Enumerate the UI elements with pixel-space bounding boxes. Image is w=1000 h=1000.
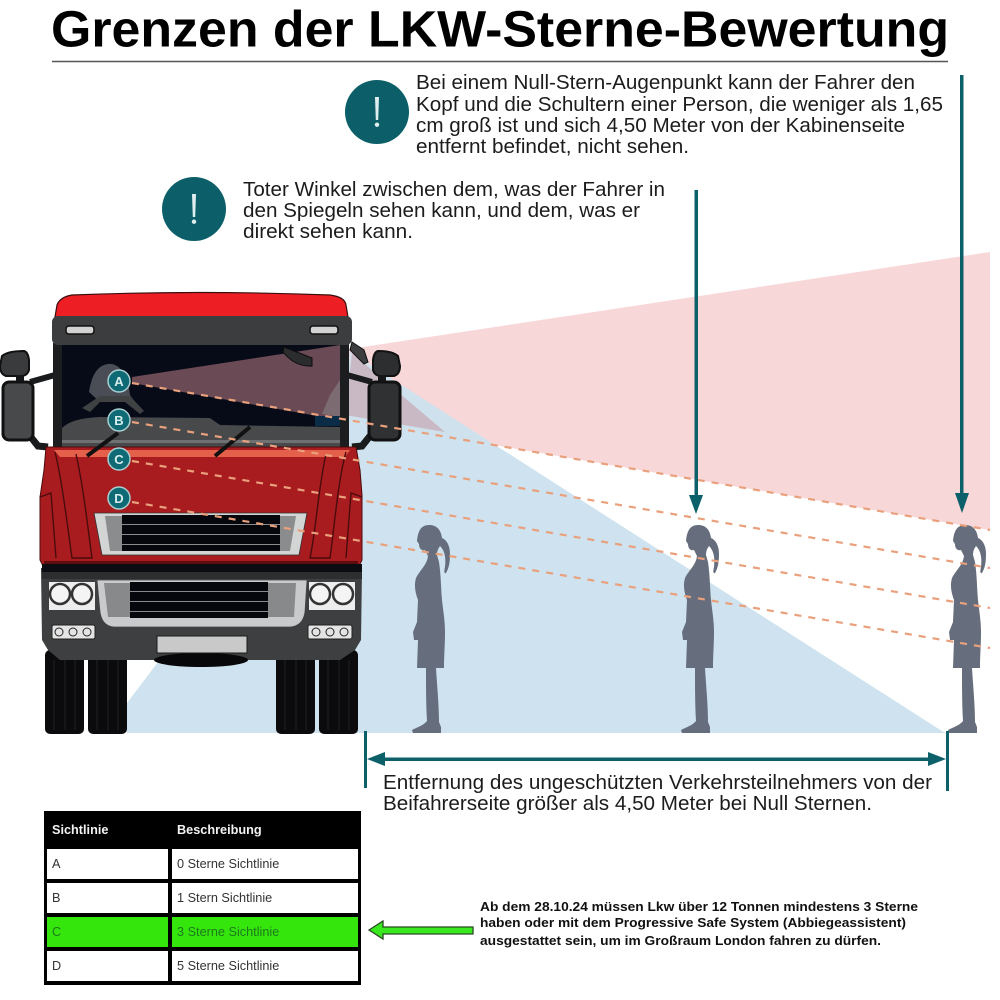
truck xyxy=(0,292,400,734)
headlights left xyxy=(49,582,95,610)
text: blind spot xyxy=(243,179,665,243)
figure: pedestrian middle xyxy=(681,525,719,733)
label D: D xyxy=(114,491,124,506)
headlights right xyxy=(309,582,355,610)
right mirrors xyxy=(347,342,400,447)
table: sight lines: 5 Sterne Sichtlinie xyxy=(177,959,279,973)
overlap zone xyxy=(345,353,445,432)
text: London requirement: Ab dem 28.10.24 müssen Lkw über 12 Tonnen mindestens 3 Sterne xyxy=(480,900,918,914)
table: sight lines: B xyxy=(52,891,60,905)
table: sight lines: C xyxy=(52,925,61,939)
pink zone: zero-star blind area xyxy=(132,252,990,530)
figure: pedestrian far xyxy=(948,525,986,733)
text: null star eye point: Kopf und die Schultern einer Person, die weniger als 1,65 xyxy=(416,94,943,116)
text: null star eye point xyxy=(416,72,943,158)
label C: C xyxy=(114,452,124,467)
text: distance caption xyxy=(383,772,932,815)
label B xyxy=(108,409,130,431)
wipers xyxy=(87,427,250,456)
arrow: down to far figure xyxy=(955,75,969,513)
sun visor xyxy=(52,316,352,345)
label D xyxy=(108,487,130,509)
arrow: down to middle figure xyxy=(689,190,703,514)
text: London requirement xyxy=(480,900,918,948)
text: blind spot: Toter Winkel zwischen dem, was der Fahrer in xyxy=(243,179,665,201)
left mirrors xyxy=(0,351,55,447)
text: null star eye point: Bei einem Null-Stern-Augenpunkt kann der Fahrer den xyxy=(416,72,915,94)
wheels xyxy=(45,650,358,734)
number plate xyxy=(157,636,247,653)
windshield xyxy=(53,343,349,453)
table: sight lines: A xyxy=(52,857,61,871)
text: blind spot: direkt sehen kann. xyxy=(243,221,413,243)
label B: B xyxy=(114,413,124,428)
roof fairing xyxy=(55,292,348,317)
dimension arrow xyxy=(364,731,949,791)
table: sight lines: 3 Sterne Sichtlinie xyxy=(177,925,279,939)
text: distance caption: Beifahrerseite größer als 4,50 Meter bei Null Sternen. xyxy=(383,793,872,815)
cab body xyxy=(40,447,362,568)
text: London requirement: haben oder mit dem Progressive Safe System (Abbiegeassistent) xyxy=(480,916,906,930)
icon: warning right xyxy=(345,80,409,144)
figure: pedestrian near xyxy=(412,525,450,733)
text: London requirement: ausgestattet sein, um im Großraum London fahren zu dürfen. xyxy=(480,934,881,948)
table: sight lines: Sichtlinie xyxy=(52,823,108,837)
bumper xyxy=(41,564,362,667)
table: sight lines: 0 Sterne Sichtlinie xyxy=(177,857,279,871)
table: sight lines: D xyxy=(52,959,61,973)
sight lines A B C D xyxy=(132,383,990,648)
title: Grenzen der LKW-Sterne-Bewertung xyxy=(51,0,949,58)
icon: warning left xyxy=(162,177,226,241)
upper grille xyxy=(94,513,307,555)
lower grille xyxy=(97,580,307,627)
fog lights xyxy=(52,625,352,639)
text: blind spot: den Spiegeln sehen kann, und dem, was er xyxy=(243,200,640,222)
blue zone: direct vision area xyxy=(127,352,945,733)
text: null star eye point: entfernt befindet, nicht sehen. xyxy=(416,136,689,158)
arrow: green pointer to row C xyxy=(369,921,473,939)
label A: A xyxy=(114,374,124,389)
table: sight lines: 1 Stern Sichtlinie xyxy=(177,891,272,905)
label A xyxy=(108,370,130,392)
label C xyxy=(108,448,130,470)
text: null star eye point: cm groß ist und sich 4,50 Meter von der Kabinenseite xyxy=(416,115,905,137)
text: distance caption: Entfernung des ungeschützten Verkehrsteilnehmers von der xyxy=(383,772,932,794)
table: sight lines xyxy=(44,811,361,985)
table: sight lines: Beschreibung xyxy=(177,823,262,837)
